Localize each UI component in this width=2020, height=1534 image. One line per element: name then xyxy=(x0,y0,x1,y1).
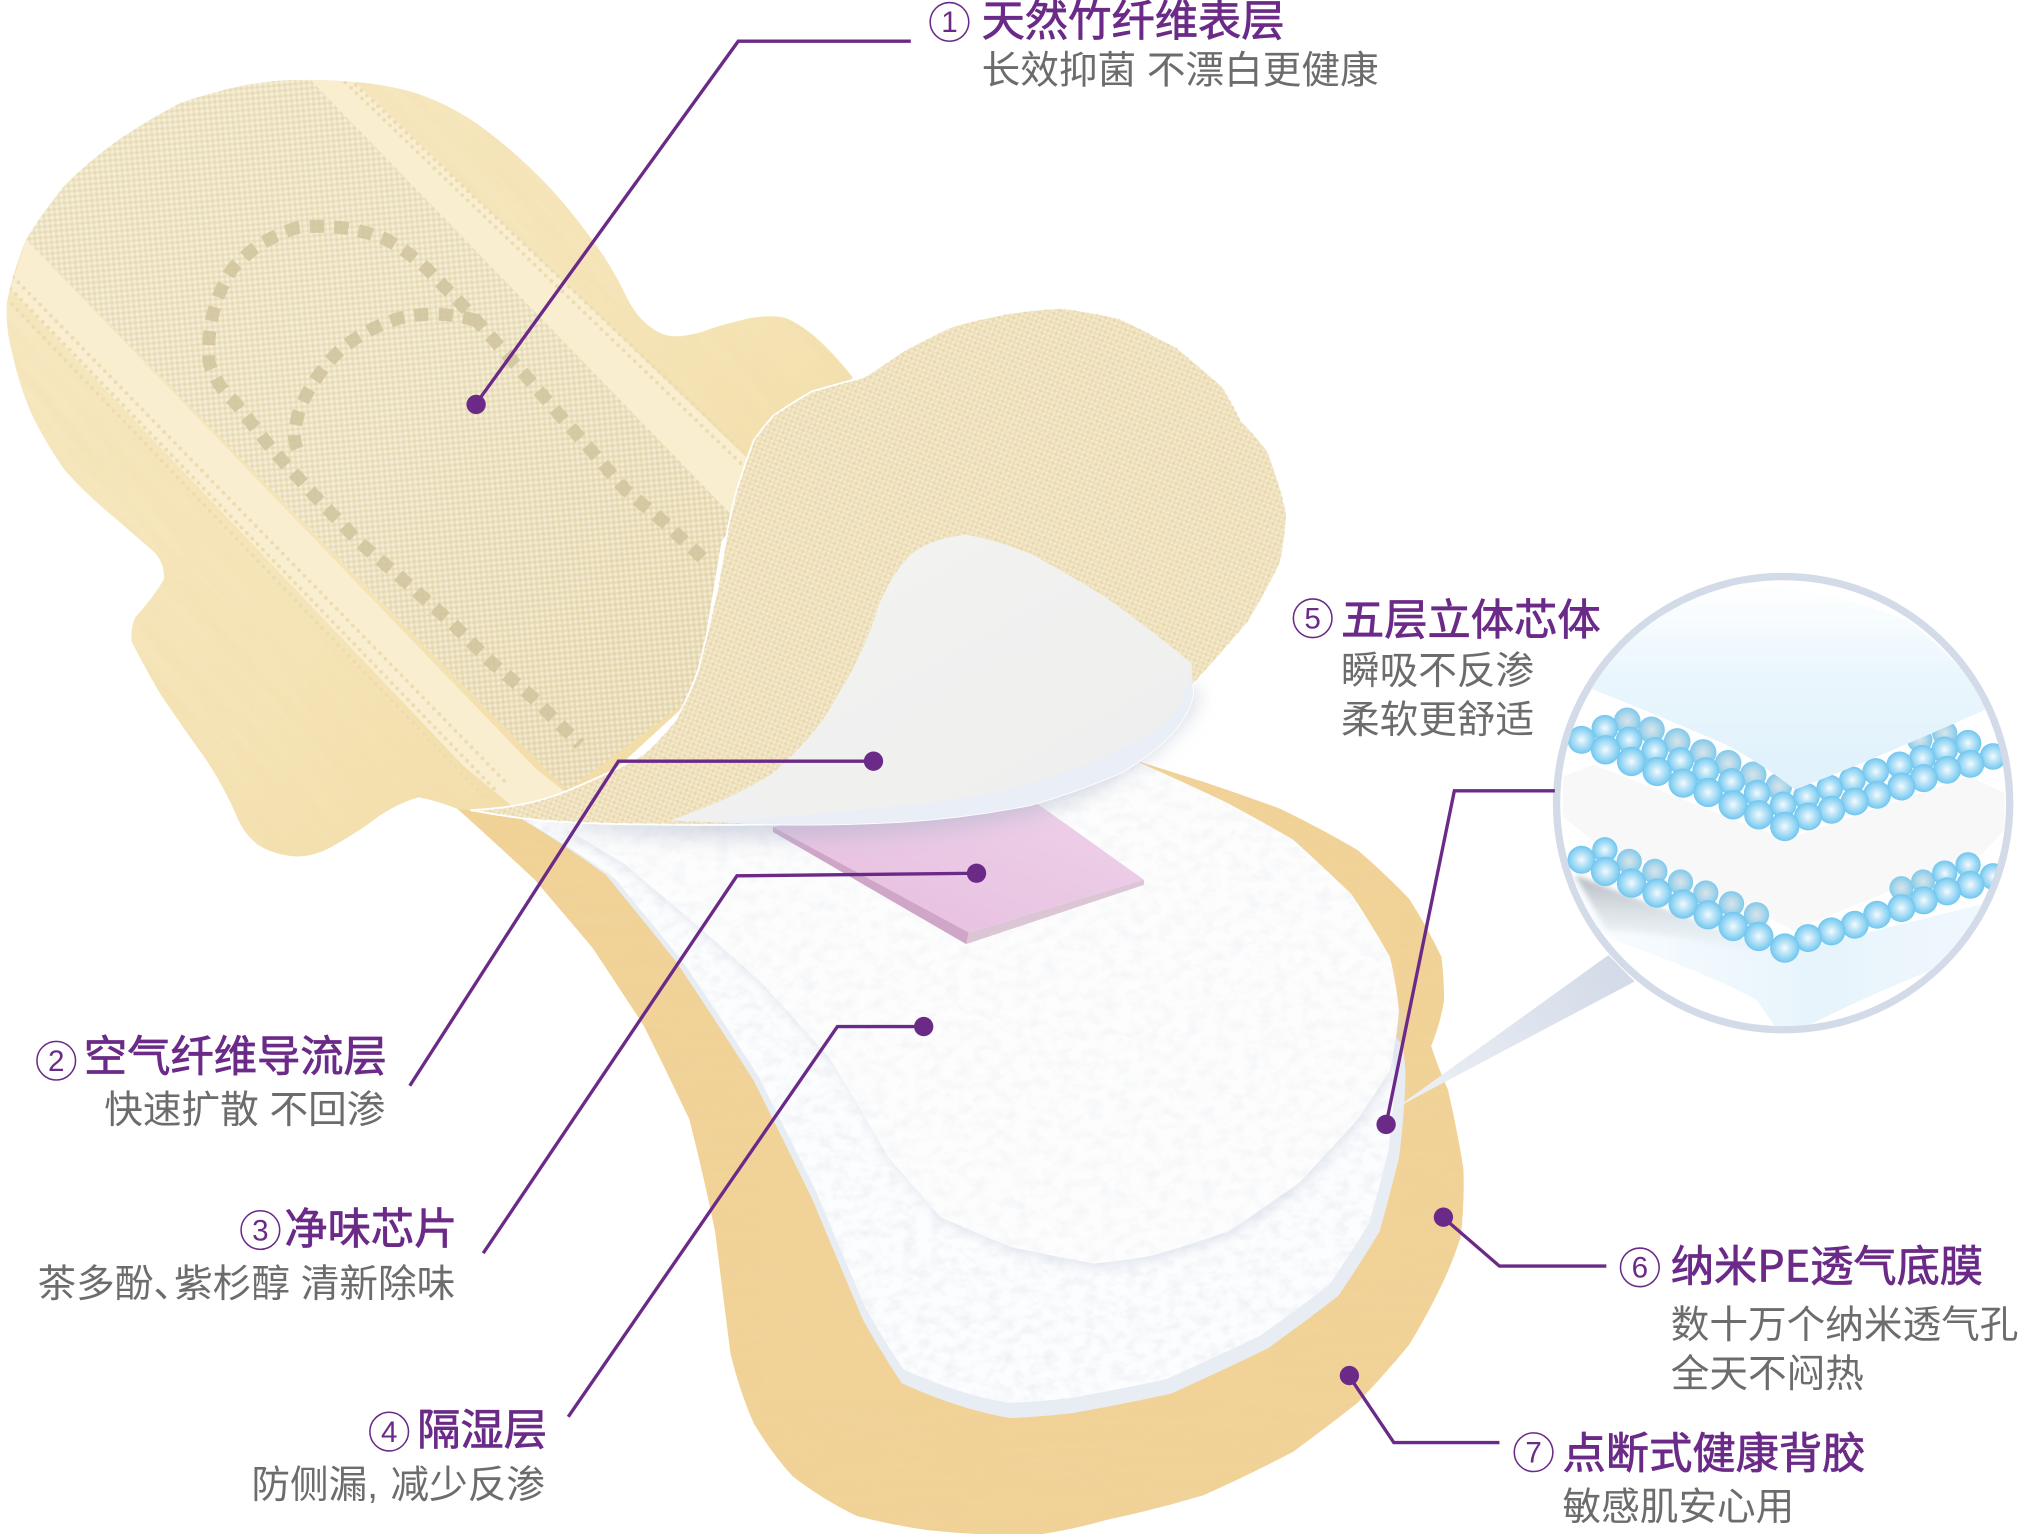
callout 6 leader xyxy=(1434,1207,1606,1266)
pointer: magnifier tail xyxy=(1396,955,1635,1108)
top absorbent sheet xyxy=(560,760,1402,1269)
callout 5 text: 五层立体芯体 xyxy=(1341,597,1601,645)
callout 2 text: 快速扩散 不回渗 xyxy=(104,1089,385,1132)
callout 3 text xyxy=(38,1206,457,1306)
callout 4 text: 防侧漏, xyxy=(251,1464,378,1507)
callout 2 text: 空气纤维导流层 xyxy=(84,1034,387,1082)
shadow under curled flap xyxy=(541,683,1198,838)
callout 5 text: 瞬吸不反渗 xyxy=(1341,650,1534,693)
callout 6 text: 全天不闷热 xyxy=(1671,1353,1864,1396)
embossed edge band: upper right xyxy=(309,79,776,514)
curled flap: woven surface and white underside xyxy=(464,296,1301,837)
lower bead layer xyxy=(1568,837,2006,963)
callout 7 leader xyxy=(1340,1366,1499,1443)
callout 2 leader xyxy=(410,752,883,1086)
callout 3 text: 紫杉醇 清新除味 xyxy=(174,1263,455,1306)
back half of pad: bamboo outer wood tone xyxy=(6,80,853,856)
callout 3 text: 茶多酚、 xyxy=(38,1263,192,1306)
flap underside rim xyxy=(702,663,1193,825)
callout 6 text: 纳米PE透气底膜 xyxy=(1671,1233,1983,1295)
callout 5 text xyxy=(1293,597,1601,742)
callout 7 text: 敏感肌安心用 xyxy=(1563,1486,1794,1529)
callout 6 text: 6 xyxy=(1632,1252,1648,1285)
upper bead layer xyxy=(1568,707,2006,841)
callout 7 text: 7 xyxy=(1525,1437,1542,1470)
callout 4 text: 减少反渗 xyxy=(390,1464,545,1507)
callout 6 text xyxy=(1621,1233,2018,1396)
callout 5 text: 5 xyxy=(1304,603,1321,636)
callout 1 leader xyxy=(466,41,911,414)
callout 4 leader xyxy=(568,1017,933,1417)
magnifier: five-layer core detail xyxy=(1557,577,2010,1030)
shadow below lower beads xyxy=(1574,874,1720,937)
bamboo fibre top sheet: woven central band xyxy=(26,80,730,790)
callout 3 text: 净味芯片 xyxy=(284,1206,457,1254)
callout 7 text xyxy=(1514,1430,1865,1529)
callout 1 text: 长效抑菌 不漂白更健康 xyxy=(982,50,1379,93)
flap underside xyxy=(670,535,1193,825)
callout 4 text: 隔湿层 xyxy=(417,1407,547,1455)
callout 5 text: 柔软更舒适 xyxy=(1341,699,1534,742)
embossed edge band: lower left xyxy=(7,240,573,814)
white fibre core layer xyxy=(2004,828,2005,829)
deodorising strip: pink xyxy=(773,781,1144,944)
callout 5 leader xyxy=(1376,791,1555,1134)
lower blue sheet xyxy=(1573,876,1986,1026)
callout 7 text: 点断式健康背胶 xyxy=(1563,1430,1865,1478)
core layer: fluffy absorbent xyxy=(515,760,1405,1418)
embossed dashed guide xyxy=(209,226,702,744)
lower pad: adhesive wing base xyxy=(458,762,1464,1534)
callout 6 text: 数十万个纳米透气孔 xyxy=(1671,1304,2018,1347)
callout 4 text: 4 xyxy=(381,1416,397,1449)
callout 1 text: 1 xyxy=(941,6,958,39)
upper blue sheet xyxy=(1590,583,1985,790)
callout 3 text: 3 xyxy=(252,1214,269,1247)
callout 2 text xyxy=(37,1034,387,1132)
callout 2 text: 2 xyxy=(48,1045,64,1078)
callout 4 text xyxy=(251,1407,547,1507)
callout 3 leader xyxy=(483,864,986,1253)
callout 1 text xyxy=(930,0,1379,93)
